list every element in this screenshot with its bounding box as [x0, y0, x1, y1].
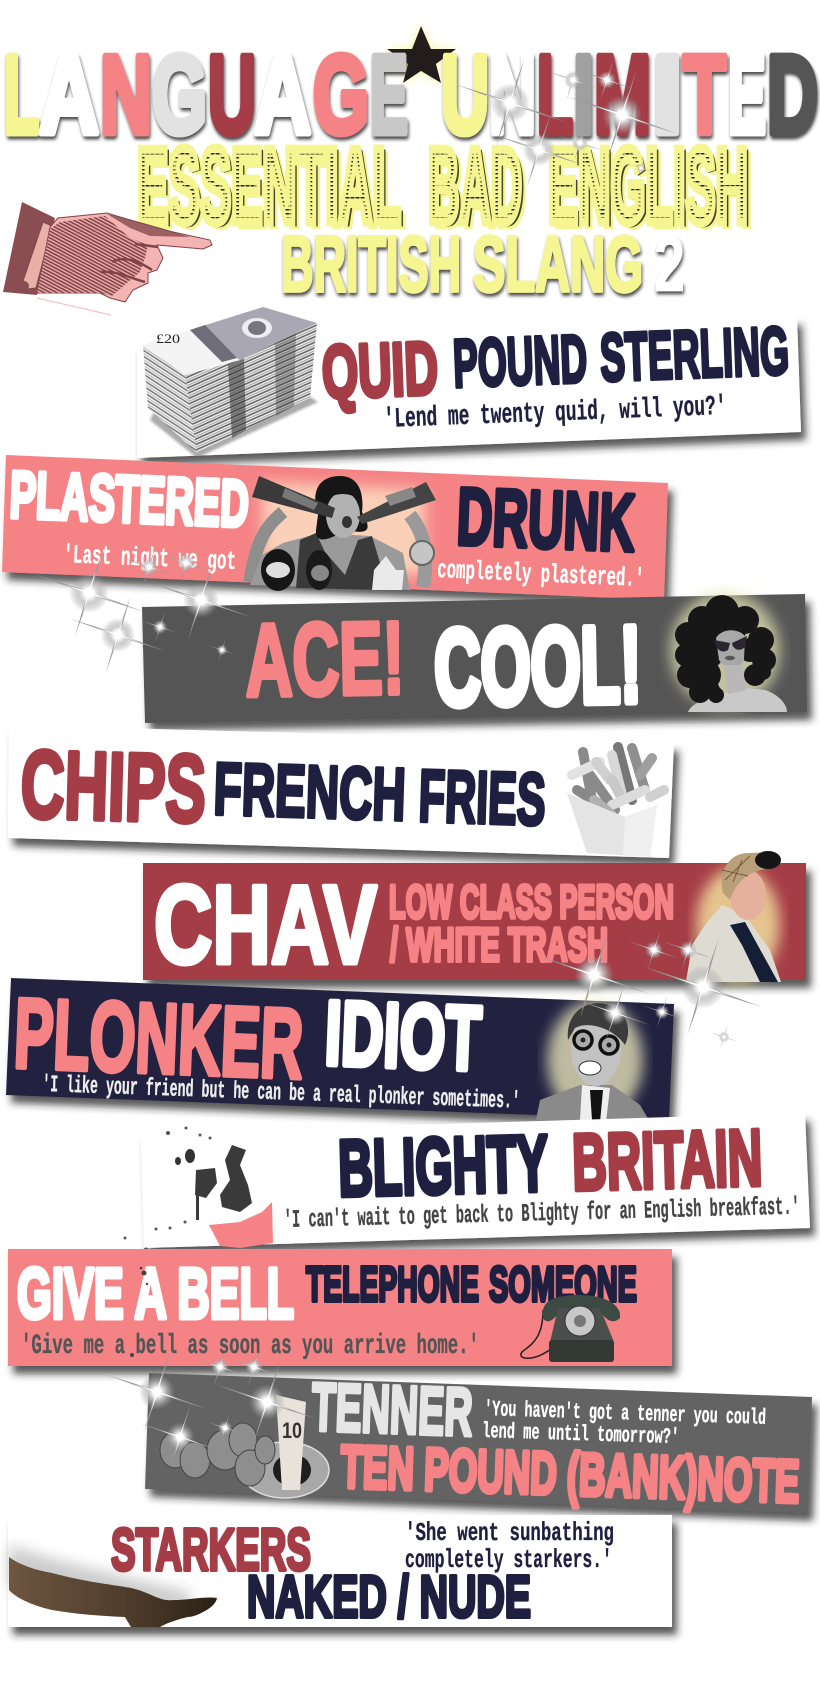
meaning: telephone someone: TELEPHONE: [306, 1258, 479, 1312]
term: chav: CHAV: [154, 863, 377, 987]
panel: give a bell: [8, 1249, 672, 1366]
quote: 'Give me a bell as soon as you arrive home.': [21, 1331, 479, 1362]
icon: pointing hand: [3, 202, 212, 315]
term: blighty: BLIGHTY: [337, 1119, 549, 1213]
subtitle: Essential Bad English: BAD: [428, 127, 522, 245]
image: stack of banknotes: [143, 307, 318, 458]
meaning: drunk: DRUNK: [455, 472, 637, 569]
quote: 'She went sunbathing: [405, 1518, 614, 1548]
subheading: British Slang 2: 2: [654, 219, 685, 308]
image: paper cone of fries: [567, 747, 664, 857]
subtitle: Essential Bad English: ESSENTIAL: [137, 127, 401, 245]
term: chips: CHIPS: [19, 731, 207, 843]
panel: chips: [8, 725, 674, 858]
meaning: cool: COOL!: [433, 603, 642, 728]
title: Language Unlimited: E: [370, 33, 408, 157]
quote start: 'Last night we got: [63, 540, 237, 577]
quote end: completely plastered.': [437, 555, 645, 594]
quote: lend me until tomorrow?': [482, 1419, 679, 1450]
image: person drinking from two bottles: [250, 476, 436, 591]
panel: ace: [34, 543, 807, 728]
subheading: British Slang 2: SLANG: [473, 219, 643, 308]
title: Language Unlimited: G: [152, 33, 207, 157]
subtitle: Essential Bad English: BAD: [428, 127, 522, 245]
title: Language Unlimited: E: [728, 33, 766, 157]
title: Language Unlimited: [4, 33, 818, 157]
icon: black rotary telephone: [521, 1295, 620, 1362]
subtitle: Essential Bad English: ESSENTIAL: [140, 130, 404, 248]
panel: chav: [143, 851, 806, 987]
panel: quid: [137, 307, 801, 458]
panel: plonker: [6, 931, 763, 1122]
panel: blighty: [124, 1113, 810, 1252]
quote: [482, 1397, 766, 1450]
meaning: idiot: IDIOT: [323, 983, 483, 1090]
subtitle: Essential Bad English: BAD: [433, 132, 527, 250]
panel: tenner: [107, 1347, 812, 1515]
meaning: french fries: FRENCH: [212, 747, 407, 836]
title: Language Unlimited: I: [652, 33, 683, 157]
title: Language Unlimited: N: [489, 33, 536, 157]
meaning: pound sterling: POUND: [452, 321, 588, 402]
image: man in glasses: [536, 1000, 650, 1122]
image: coins and rolled banknote: 10: [282, 1418, 302, 1443]
term: starkers: STARKERS: [111, 1517, 311, 1583]
quote: completely starkers.': [405, 1545, 612, 1575]
term: quid: QUID: [320, 326, 440, 414]
meaning: french fries: FRIES: [417, 754, 547, 841]
sparkles over chav: [629, 930, 713, 970]
sparkles over coins: [107, 1347, 317, 1469]
image: stack of banknotes: £20: [156, 331, 180, 346]
image: bare leg: [9, 1557, 217, 1627]
subtitle: Essential Bad English: ESSENTIAL: [137, 127, 401, 245]
term: give a bell: GIVE A BELL: [17, 1255, 294, 1334]
subtitle: Essential Bad English: BAD: [430, 130, 524, 248]
term: plastered: PLASTERED: [8, 457, 250, 541]
soft shadow behind leg: [9, 1545, 190, 1612]
title: Language Unlimited: U: [208, 33, 256, 157]
term: ace: ACE!: [244, 600, 405, 718]
star above the title: [387, 26, 456, 83]
title: Language Unlimited: N: [100, 33, 152, 157]
image: coins and rolled banknote: [160, 1395, 329, 1498]
title: Language Unlimited: T: [683, 33, 726, 157]
title: Language Unlimited: L: [537, 33, 573, 157]
panel: starkers: [8, 1515, 672, 1630]
term: plonker: PLONKER: [12, 977, 305, 1099]
title: Language Unlimited: M: [594, 33, 651, 157]
title: Language Unlimited: A: [254, 33, 311, 157]
ink splat: [130, 1267, 148, 1357]
term: tenner: TENNER: [310, 1369, 474, 1451]
sparkles between plastered and ace: [34, 543, 251, 673]
meaning: naked / nude: NAKED / NUDE: [247, 1564, 531, 1630]
sparkles over plonker: [539, 931, 763, 1049]
meaning: telephone someone: SOMEONE: [489, 1258, 637, 1312]
image: woman in sunglasses: [670, 592, 787, 712]
title: Language Unlimited: I: [573, 33, 594, 157]
title: Language Unlimited: A: [39, 33, 99, 157]
sparkles over the title: [455, 59, 677, 186]
quote: [405, 1518, 614, 1575]
meaning: white trash: / WHITE TRASH: [390, 918, 608, 971]
subtitle: Essential Bad English: ESSENTIAL: [142, 132, 406, 250]
image: man in plaid cap: [686, 851, 781, 983]
title: Language Unlimited: L: [4, 33, 39, 157]
title: Language Unlimited: G: [313, 33, 369, 157]
subheading: British Slang 2: BRITISH: [281, 219, 461, 308]
panel: plastered: [2, 455, 668, 600]
title: Language Unlimited: U: [441, 33, 489, 157]
image: ink map of Britain: [124, 1126, 273, 1252]
